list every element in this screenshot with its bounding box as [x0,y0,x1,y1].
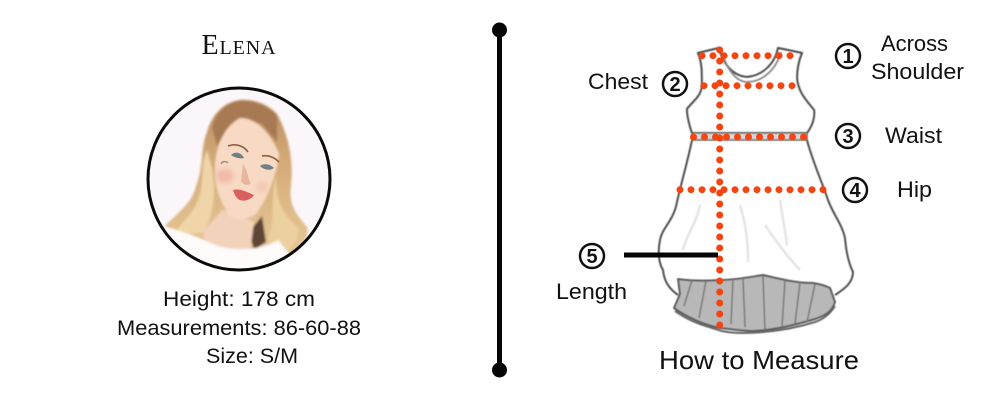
badge 1: 1 [842,46,854,68]
label: across shoulder: Shoulder [871,59,964,84]
badge 3 [836,124,860,148]
badge 2: 2 [669,74,681,96]
skirt [659,140,692,295]
vertical divider with end dots [492,22,507,378]
badge 1 [836,44,860,68]
label: hip: Hip [897,177,932,202]
measurement line: hip [680,186,824,193]
badge 5 [580,244,604,268]
label: chest: Chest [588,69,648,94]
badge 5: 5 [586,246,598,268]
badge 4: 4 [849,180,861,202]
measurement line: length [716,50,723,326]
label: length: Length [556,279,627,304]
model height: Height: 178 cm [163,288,315,311]
measurement line: waist [694,134,805,140]
caption: how to measure: How to Measure [659,345,859,375]
heading: model name: Elena [202,30,276,61]
model portrait photo [148,88,330,290]
model size: Size: S/M [206,345,298,368]
badge 2 [663,72,687,96]
panel: how to measure [556,31,964,375]
label: across shoulder: Across [881,31,948,56]
label: waist: Waist [885,123,942,148]
panel: model profile [117,30,361,368]
length pointer [624,252,718,258]
measurement line: chest [704,82,794,89]
measurement line: across shoulder [702,52,791,59]
petticoat [674,275,835,331]
waistband [692,133,807,140]
label: across shoulder [871,31,964,84]
infographic canvas [118,22,964,378]
badge 4 [843,178,867,202]
badge 3: 3 [842,126,854,148]
bodice [687,48,814,133]
dress illustration [659,48,853,333]
model measurements: Measurements: 86-60-88 [117,317,361,340]
